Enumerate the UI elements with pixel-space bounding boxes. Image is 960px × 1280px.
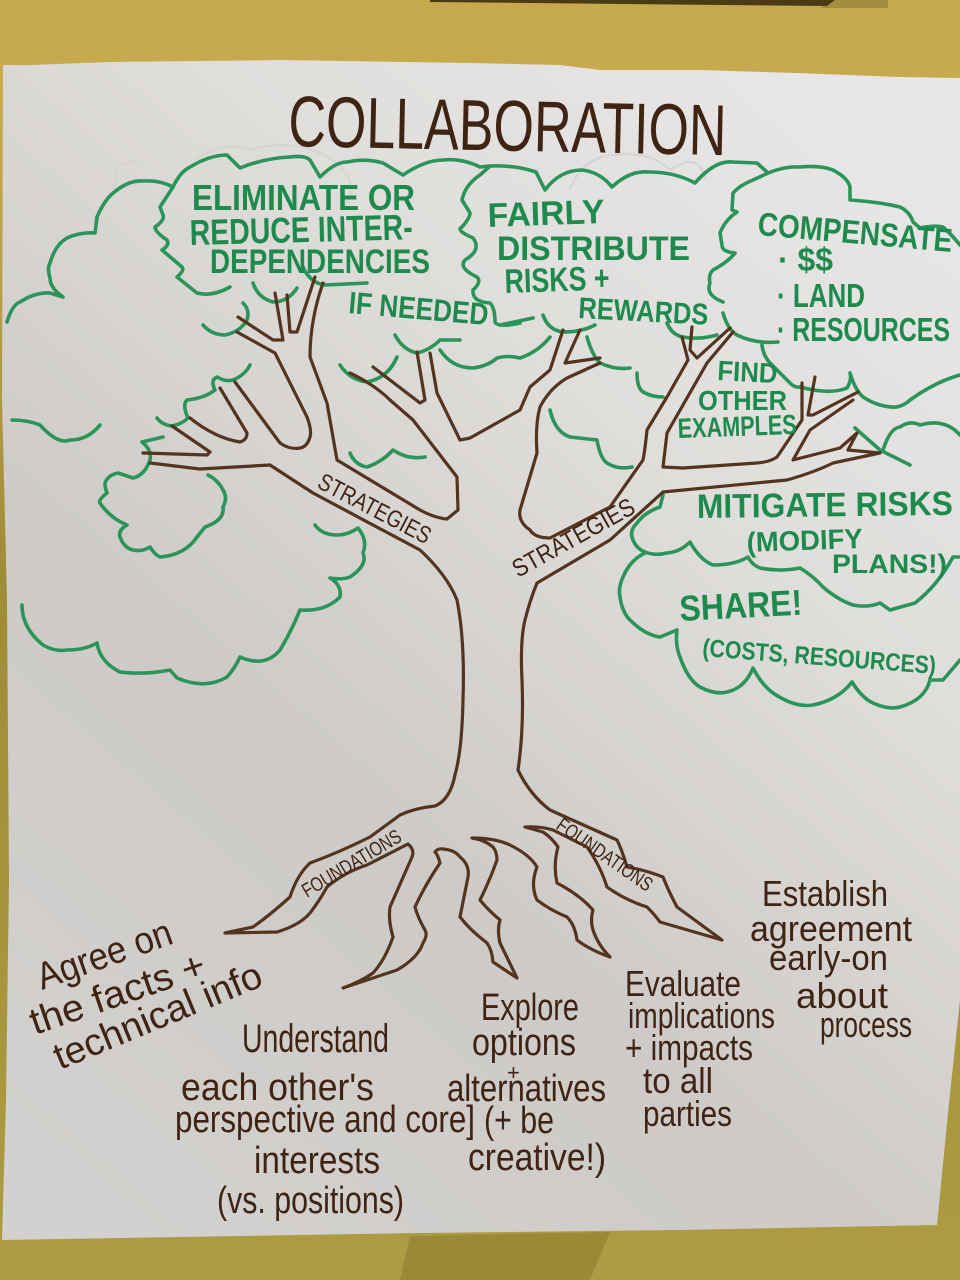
note: evaluate implications: to all [643,1060,713,1101]
tree trunk, branches and roots [143,277,880,988]
note: understand perspectives: Understand [242,1017,389,1061]
note: explore options [447,987,606,1179]
note: understand perspectives: (vs. positions) [217,1180,404,1222]
note: explore options: Explore [481,987,579,1029]
strategy: eliminate or reduce interdependencies: ELIMINATE OR [192,177,415,218]
note: explore options: + [507,1060,520,1085]
canopy wisps [253,283,297,302]
strategy: find other examples [677,355,797,444]
strategy: fairly distribute risks and rewards: RISKS + [504,259,610,301]
note: understand perspectives [175,1017,475,1222]
strategy: find other examples: OTHER [698,385,787,416]
strategy: compensate: · LAND [777,277,865,314]
cloud: compensate [709,166,960,302]
strategy: compensate: · $$ [778,241,833,278]
note: agree on the facts [24,912,269,1078]
label: foundations right: FOUNDATIONS [552,814,656,896]
note: explore options: alternatives [447,1068,606,1110]
note: understand perspectives: each other's [181,1067,374,1109]
note: understand perspectives: perspective and core] [175,1099,475,1141]
strategy: share: SHARE! [678,582,803,629]
note: establish agreement: about [796,975,888,1016]
note: if needed: IF NEEDED [347,285,490,332]
foundation notes [24,873,912,1222]
note: understand perspectives: interests [254,1140,380,1182]
strategy: compensate [756,205,954,348]
note: explore options: (+ be [484,1100,554,1142]
label: strategies left: STRATEGIES [313,468,436,550]
cloud: mitigate risks [632,495,960,610]
note: establish agreement [750,873,912,1045]
note: agree on the facts: technical info [47,955,269,1078]
left branches [373,352,425,403]
right branches [793,400,880,460]
faint show-through sketches [113,145,705,205]
strategy: mitigate risks [697,485,953,579]
strategy: eliminate or reduce interdependencies: DEPENDENCIES [210,243,430,281]
strategy: fairly distribute risks and rewards: REWARDS [578,292,709,332]
note: agree on the facts: the facts + [24,944,211,1044]
note: explore options: creative!) [468,1137,606,1179]
cloud: left side [157,365,250,426]
strategy: find other examples: FIND [717,355,778,389]
note: evaluate implications [625,963,775,1134]
strategy: fairly distribute risks and rewards: DISTRIBUTE [497,230,690,268]
cloud: lower left [22,525,365,684]
strategy: eliminate or reduce interdependencies [189,177,430,281]
strategy: eliminate or reduce interdependencies: REDUCE INTER- [189,206,413,253]
note: agree on the facts: Agree on [31,912,178,998]
strategy: fairly distribute risks and rewards: FAIRLY [487,193,606,235]
tree annotations [298,468,656,902]
strategy: find other examples: EXAMPLES [677,409,797,444]
cloud: lower right of compensate [762,345,960,407]
cloud: far left [7,181,173,322]
note: evaluate implications: + impacts [625,1027,753,1068]
strategy: mitigate risks: PLANS!) [832,549,947,579]
cloud: eliminate [155,155,490,294]
note: evaluate implications: Evaluate [625,963,741,1004]
note: establish agreement: Establish [762,873,888,914]
note: establish agreement: agreement [750,908,912,949]
note: evaluate implications: parties [643,1093,732,1134]
note: establish agreement: early-on [769,937,888,978]
cloud: fairly distribute [460,162,768,325]
strategy: share [678,582,937,680]
label: strategies right: STRATEGIES [507,493,640,583]
tree canopy outlines [7,155,960,708]
dark object at top edge [430,0,888,8]
title: COLLABORATION [288,82,727,171]
note: establish agreement: process [820,1004,912,1045]
strategy: mitigate risks: (MODIFY [746,523,863,558]
cloud: share [619,553,960,708]
note: evaluate implications: implications [628,995,775,1036]
trunk and roots [150,453,880,988]
note: explore options: options [472,1022,576,1064]
label: foundations left: FOUNDATIONS [298,826,406,902]
wall shadow under paper [400,1232,610,1280]
green strategy labels [189,177,954,680]
strategy: fairly distribute risks and rewards [487,193,709,332]
